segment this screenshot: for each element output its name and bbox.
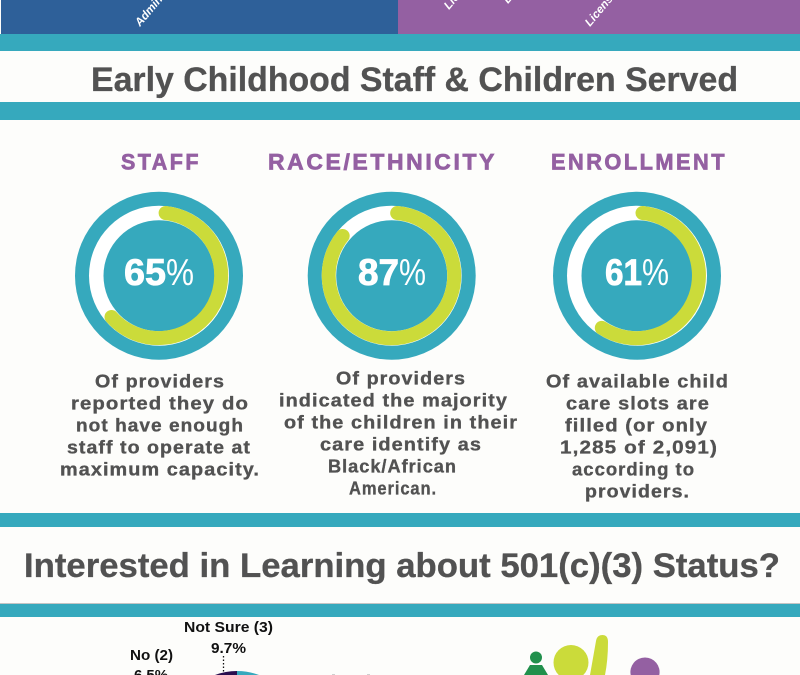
text: staff description: Of providers [95,370,225,392]
text: enrollment description: providers. [585,480,690,502]
text: race and ethnicity description [279,368,518,498]
label: no: No (2) [130,647,173,664]
donut chart: 61 percent: 61 [605,252,642,293]
text: enrollment description: filled (or only [565,414,708,436]
text: staff description [60,370,260,480]
donut chart: 65 percent: % [166,252,194,293]
text: staff description: not have enough [76,414,244,436]
text: enrollment description: according to [572,458,695,480]
text: staff description: reported they do [71,392,249,414]
text: staff description: staff to operate at [67,436,251,458]
donut chart: 65 percent: 65 [124,252,166,293]
donut chart: 61 percent: % [642,252,669,293]
heading: interested in learning about 501(c)(3) status: Interested in Learning about 501(c)(3) Status? [24,547,780,585]
label: not sure: 9.7% [211,640,246,657]
panel: race and ethnicity [268,150,518,498]
donut chart: 87 percent: 87 [358,252,399,293]
icon: people illustration [524,635,660,675]
heading: early childhood staff and children served: Early Childhood Staff & Children Served [91,61,738,99]
text: race and ethnicity description: Black/African [328,456,457,476]
icon: purple figure [630,657,660,675]
panel: staff [60,150,260,480]
top chart remnant: blue and purple bars [1,0,800,34]
heading: staff: STAFF [121,150,201,174]
donut chart: 87 percent: % [399,252,426,293]
text: enrollment description: Of available child [546,370,729,392]
label: not sure: Not Sure (3) [184,619,273,636]
text: enrollment description: 1,285 of 2,091) [560,436,718,458]
text: enrollment description [546,370,729,502]
label: no [130,647,173,675]
icon: green person [524,652,548,675]
text: staff description: maximum capacity. [60,458,260,480]
text: race and ethnicity description: American. [349,478,437,498]
label: not sure [184,619,273,657]
heading: race/ethnicity: RACE/ETHNICITY [268,150,497,174]
leader line: not sure [222,656,224,672]
icon: lime figure [554,635,608,675]
donut chart: 61 percent [553,192,721,360]
donut chart: 87 percent [308,192,476,360]
text: race and ethnicity description: indicated the majority [279,390,508,410]
heading: enrollment: ENROLLMENT [551,150,727,174]
pie chart: interest in 501(c)(3) status [130,619,273,675]
text: race and ethnicity description: Of providers [336,368,466,388]
donut chart: 65 percent [75,192,243,360]
panel: enrollment [546,150,729,502]
text: race and ethnicity description: care identify as [320,434,482,454]
text: race and ethnicity description: of the children in their [284,412,518,432]
text: enrollment description: care slots are [566,392,710,414]
